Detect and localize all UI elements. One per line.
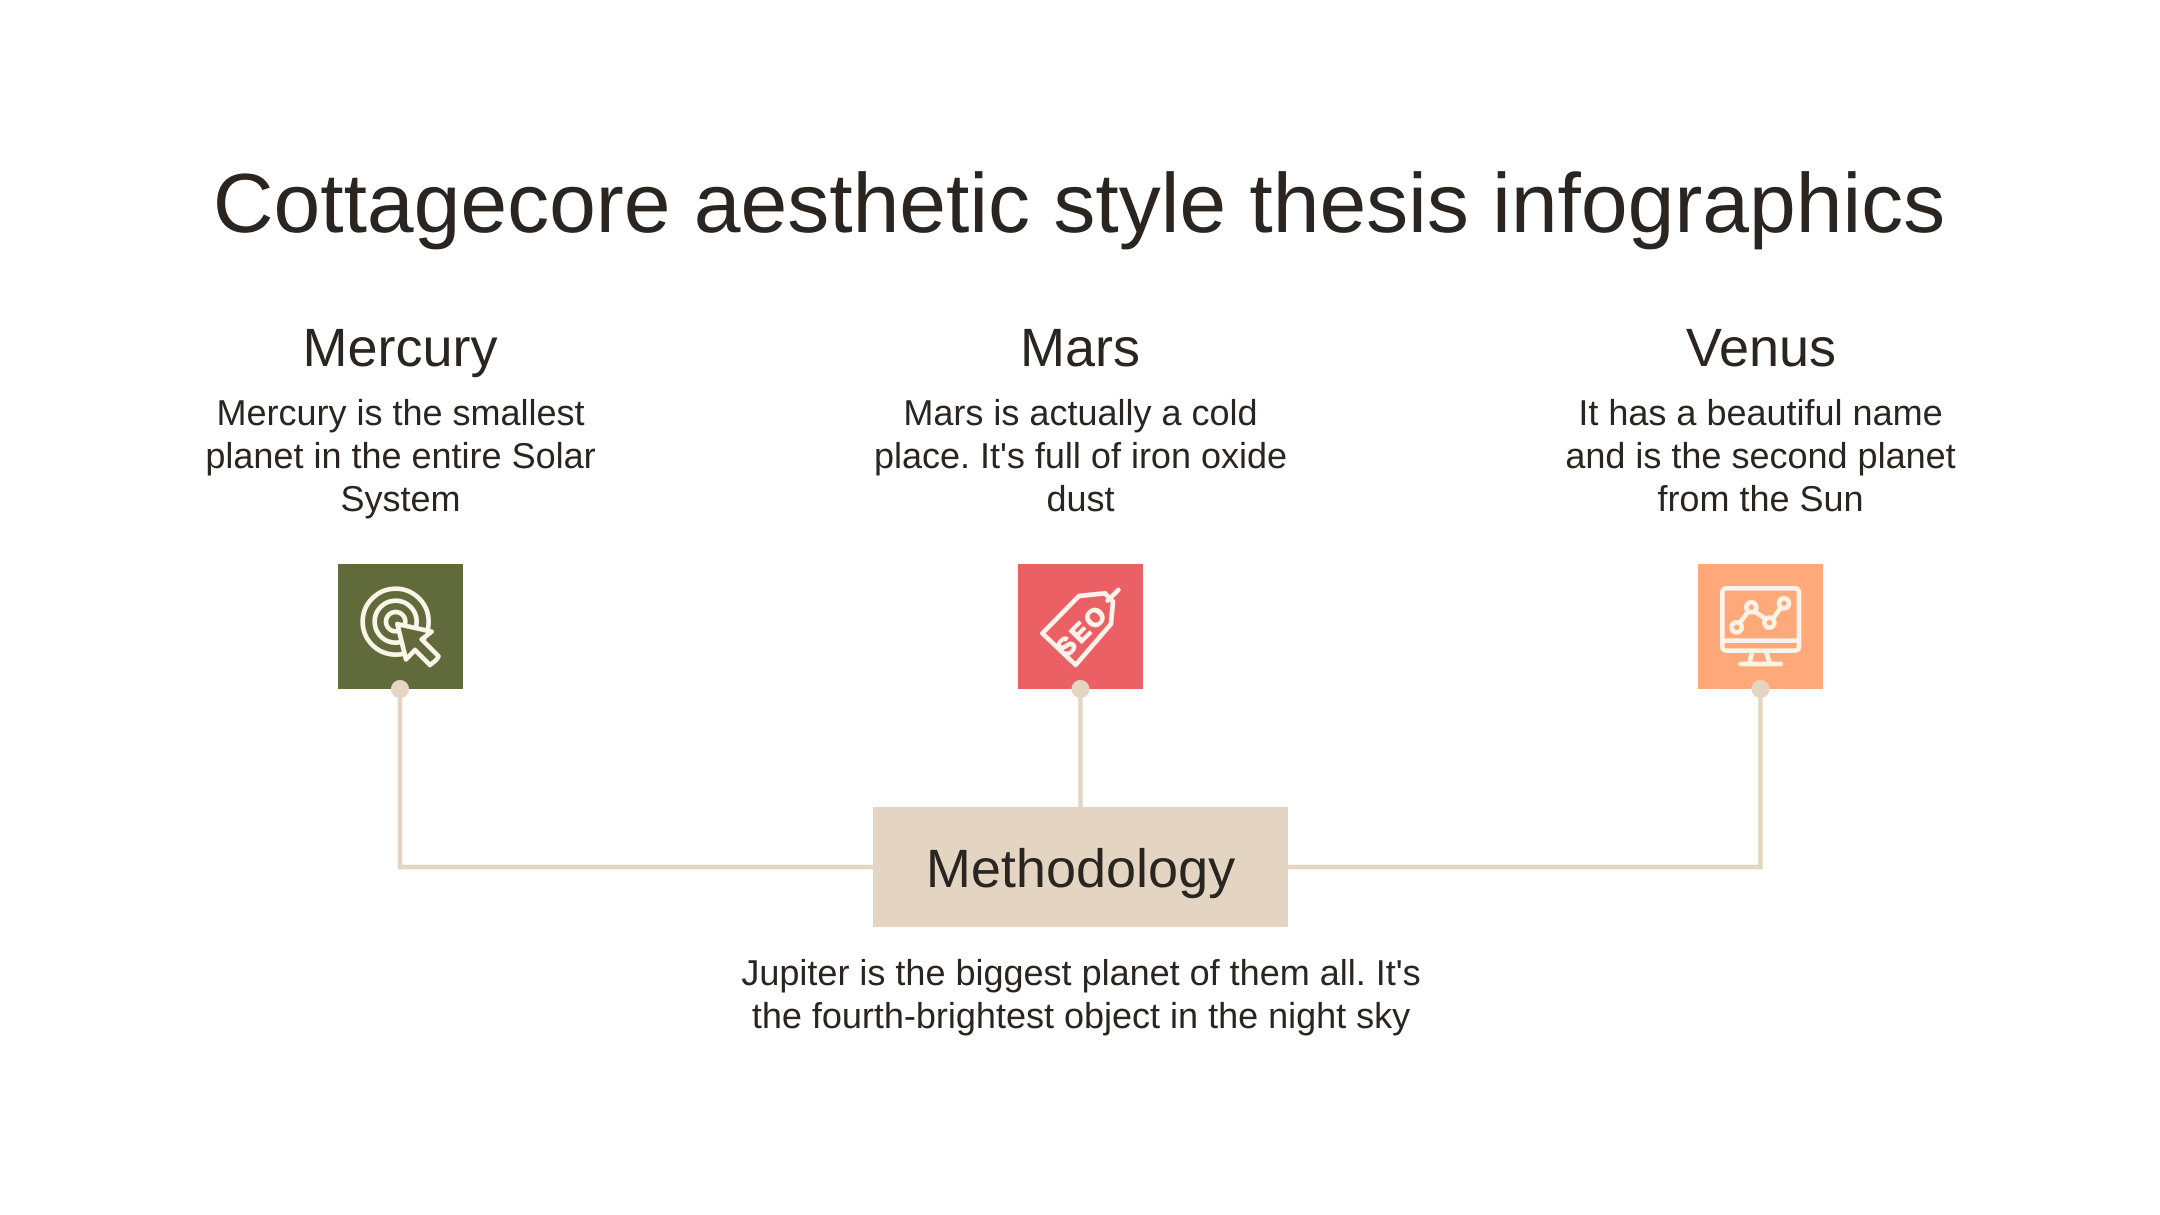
text: Venus description: and is the second planet [1565,435,1956,476]
panel: Venus [1565,318,1956,689]
icon: monitor chart [1698,564,1823,689]
heading: Venus: Venus [1686,318,1836,378]
icon: SEO tag: SEO [1050,599,1114,662]
text: Mercury description: System [340,478,461,519]
text: Mars description: dust [1046,478,1115,519]
text: Venus description: from the Sun [1657,478,1864,519]
panel: Methodology box: Methodology [926,839,1235,899]
text: Venus description [1565,392,1956,519]
icon: target with cursor [338,564,463,689]
icon: SEO tag [1018,564,1143,689]
icon anchor dots [391,680,1770,698]
panel: Methodology box [873,807,1288,927]
title: Cottagecore aesthetic style thesis infographics [213,156,1945,250]
text: Mercury description: Mercury is the smallest [216,392,585,433]
text: Mercury description [205,392,596,519]
panel: Mercury [205,318,596,689]
text: Mars description: Mars is actually a cold [903,392,1258,433]
text: Methodology description: the fourth-brightest object in the night sky [752,995,1410,1036]
heading: Mercury: Mercury [302,318,498,378]
text: Mars description [874,392,1287,519]
text: Venus description: It has a beautiful name [1578,392,1943,433]
text: Mars description: place. It's full of iron oxide [874,435,1287,476]
text: Methodology description [741,952,1421,1036]
heading: Mars: Mars [1020,318,1140,378]
text: Mercury description: planet in the entire Solar [205,435,596,476]
panel: Mars [874,318,1287,689]
text: Methodology description: Jupiter is the biggest planet of them all. It's [741,952,1421,993]
